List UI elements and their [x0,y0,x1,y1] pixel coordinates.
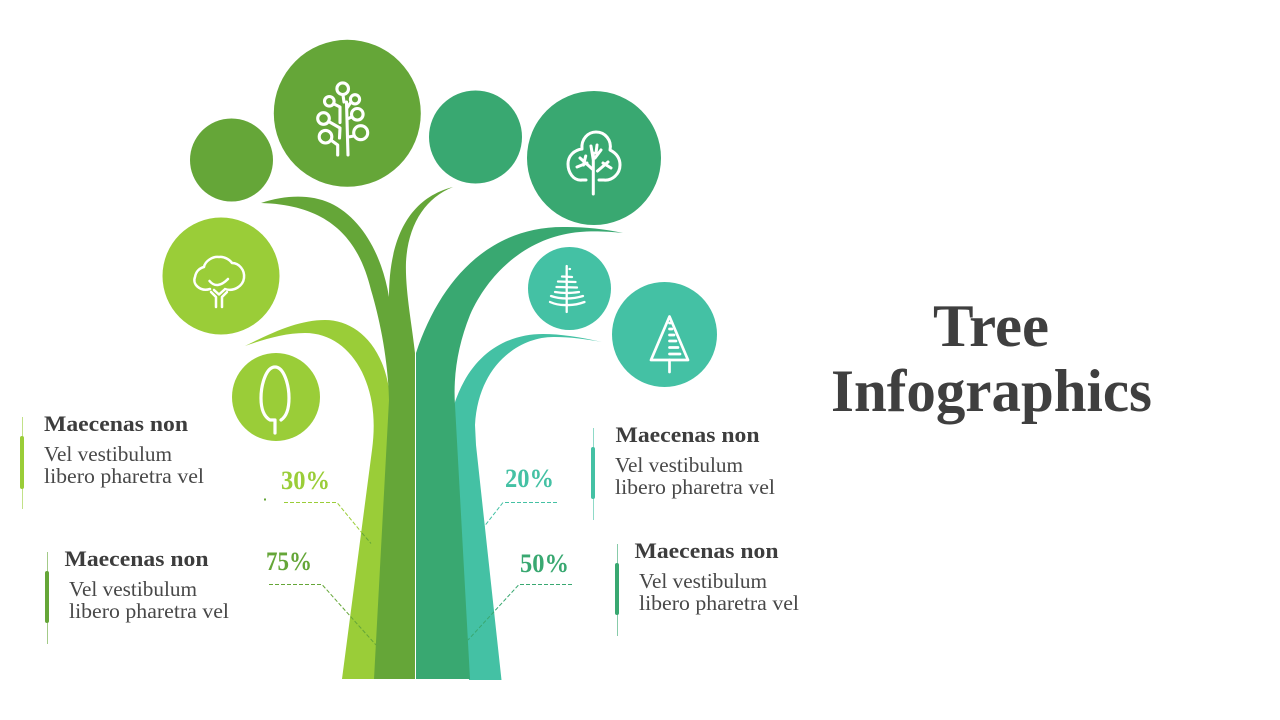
title: Infographics [831,358,1152,424]
title: Tree [933,293,1049,359]
branch: teal [454,334,602,680]
marker [591,428,595,520]
leader line: 30% [264,498,371,544]
leader line: 50% [468,584,572,640]
percentage: 20%: 20% [505,464,554,493]
icon badge: broad tree [162,218,280,334]
text block: bottom left [45,546,229,644]
heading: Maecenas non [616,422,760,447]
icon: leaf tree [261,367,289,433]
circle: emerald [429,90,522,184]
body: Vel vestibulum [639,569,767,593]
icon badge: pine tree [528,247,611,330]
percentage: 75%: 75% [266,547,312,576]
icon: broad tree [194,257,244,307]
icon badge: triangle tree [612,282,717,387]
marker [20,417,24,509]
icon: circuit tree [318,83,368,155]
text block: top left [20,411,204,509]
body: Vel vestibulum [44,442,172,466]
circle: medium green [190,118,273,202]
icon badge: round tree [527,91,661,225]
branch: dark green [261,187,453,679]
heading: Maecenas non [64,546,208,571]
icon: round tree [568,132,620,194]
tree trunk and branches [245,187,623,680]
body: libero pharetra vel [44,464,204,488]
body: libero pharetra vel [615,475,775,499]
body: Vel vestibulum [69,577,197,601]
leader line: 20% [483,502,557,528]
icon badge: leaf tree [232,353,320,441]
leader line: 75% [269,584,376,645]
icon: triangle tree [651,316,688,372]
heading: Maecenas non [44,411,188,436]
body: Vel vestibulum [615,453,743,477]
text block: bottom right [615,538,799,636]
percentage: 30%: 30% [281,466,330,495]
heading: Maecenas non [634,538,778,563]
marker [615,544,619,636]
marker [45,552,49,644]
icon badge: circuit tree [274,40,421,187]
body: libero pharetra vel [639,591,799,615]
icon: pine tree [550,266,584,312]
percentage: 50%: 50% [520,549,569,578]
branch: emerald [416,227,623,679]
text block: top right [591,422,775,520]
body: libero pharetra vel [69,599,229,623]
branch: light green [245,320,392,679]
